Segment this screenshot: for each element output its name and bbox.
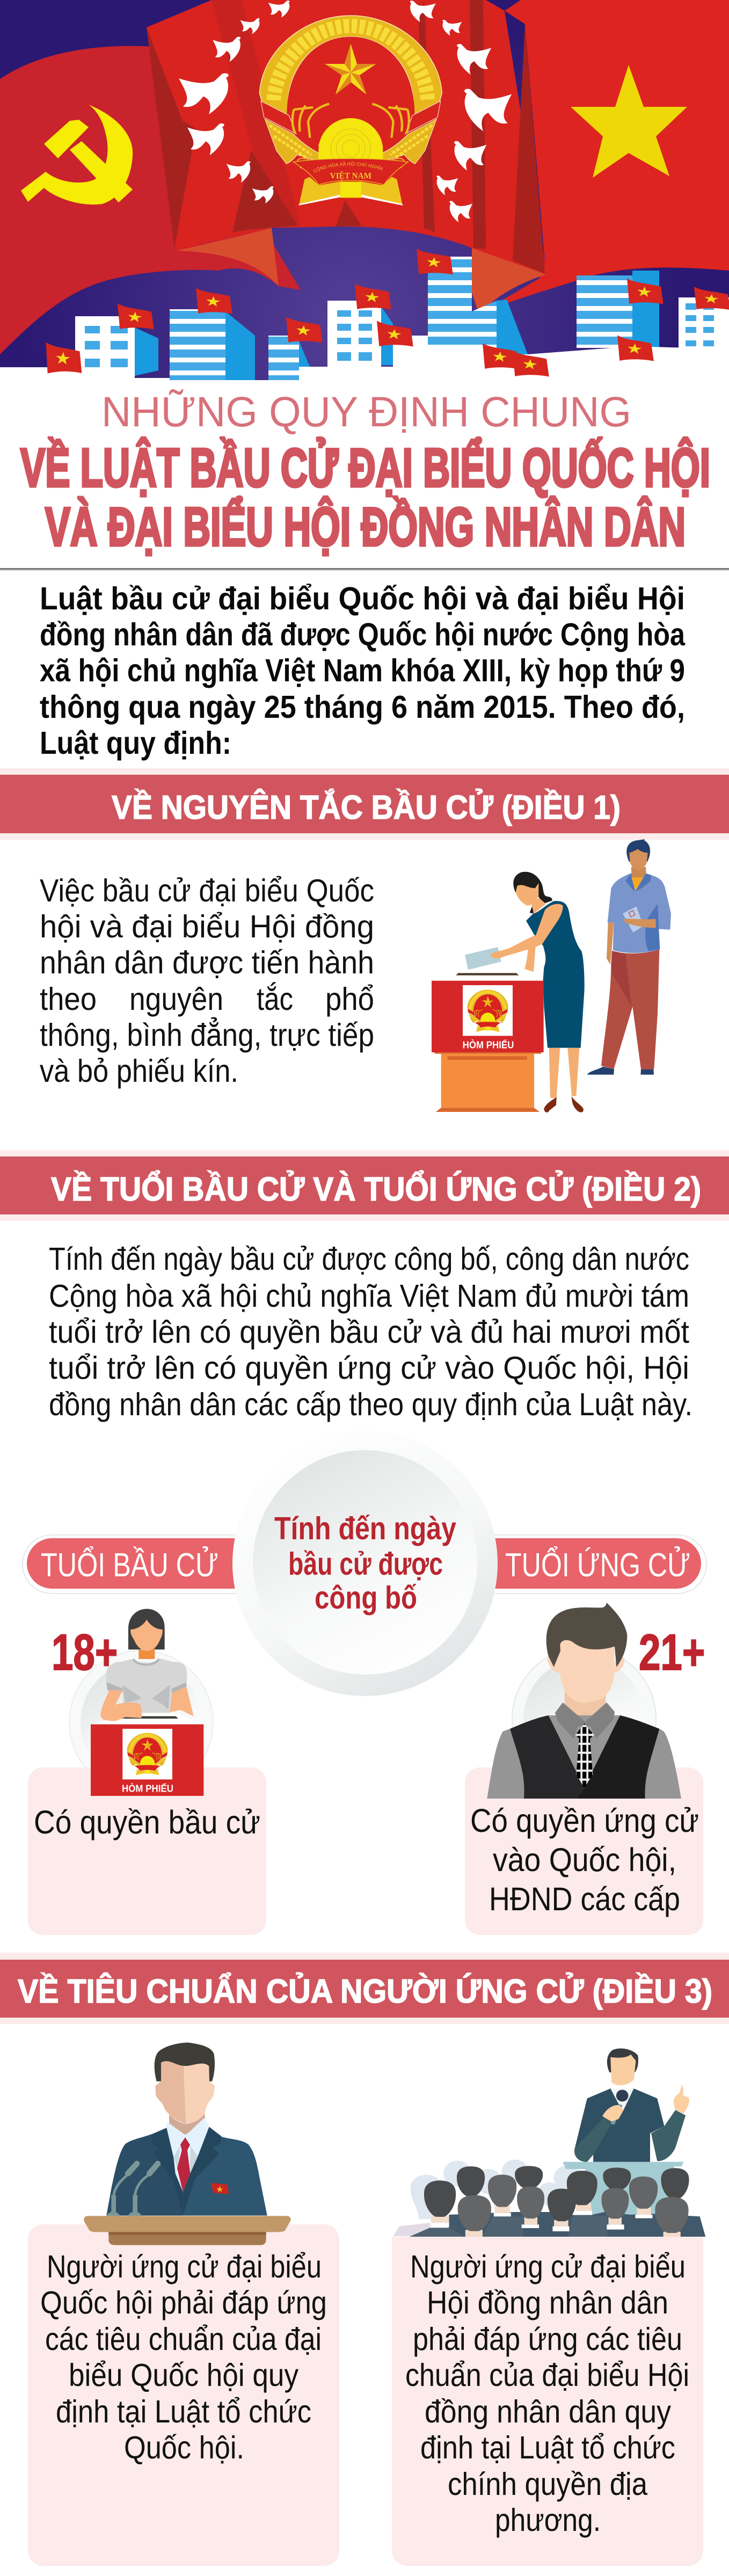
card: tiêu chuẩn đại biểu Quốc hội: định tại Luật tổ chức [56, 2394, 311, 2429]
pill label: tuổi bầu cử [23, 1535, 264, 1593]
icon: yellow star of the national flag [571, 65, 687, 178]
icon: national emblem [259, 15, 442, 206]
card: có quyền ứng cử: Có quyền ứng cử [470, 1802, 699, 1839]
halo behind left figure [69, 1650, 213, 1794]
section heading: Điều 3 [0, 1953, 729, 2024]
card: tiêu chuẩn đại biểu Hội đồng nhân dân: phải đáp ứng các tiêu [413, 2322, 682, 2357]
text block: Điều 1: Việc bầu cử đại biểu Quốc [40, 873, 374, 908]
card: tiêu chuẩn đại biểu Quốc hội: Quốc hội phải đáp ứng [40, 2285, 327, 2320]
intro paragraph: thông qua ngày 25 tháng 6 năm 2015. Theo đó, [40, 689, 685, 725]
text block: Điều 1: phổ [325, 981, 374, 1017]
card: tiêu chuẩn đại biểu Quốc hội [28, 2224, 339, 2566]
number: 21+: 21+ [639, 1624, 705, 1681]
icon: national emblem: VIỆT NAM [330, 172, 372, 181]
halo behind right figure [512, 1647, 656, 1791]
section heading: Điều 1: VỀ NGUYÊN TẮC BẦU CỬ (ĐIỀU 1) [112, 789, 621, 826]
text block: Điều 1: nguyên [129, 981, 223, 1017]
audience bodies [448, 2212, 705, 2237]
podium [563, 2162, 683, 2215]
necks and collars [431, 2204, 681, 2237]
man holding ballot [587, 839, 671, 1075]
illustration: delegate at lectern [84, 2042, 291, 2245]
small waving flags [43, 249, 729, 380]
card: tiêu chuẩn đại biểu Hội đồng nhân dân [392, 2237, 703, 2566]
lectern [84, 2216, 291, 2232]
ballot box [432, 973, 544, 1112]
microphones [114, 2164, 158, 2212]
audience heads front row [458, 2175, 689, 2233]
card: có quyền ứng cử [465, 1767, 703, 1935]
pill label: tuổi bầu cử: TUỔI BẦU CỬ [41, 1546, 218, 1584]
section heading: Điều 1 [0, 768, 729, 840]
intro paragraph: Luật bầu cử đại biểu Quốc hội và đại biểu Hội [40, 581, 685, 616]
pill label: tuổi ứng cử [462, 1535, 706, 1593]
ballot box: HÒM PHIẾU [463, 1039, 514, 1051]
text block: Điều 1: nhân dân được tiến hành [40, 945, 374, 980]
intro paragraph [40, 581, 686, 761]
text block: Điều 1: theo [40, 981, 97, 1017]
illustration: man candidate 21+ [487, 1603, 705, 1799]
text block: Điều 1: hội và đại biểu Hội đồng [40, 909, 374, 944]
card: có quyền bầu cử: Có quyền bầu cử [34, 1804, 260, 1840]
card: tiêu chuẩn đại biểu Quốc hội: Quốc hội. [124, 2430, 244, 2465]
card: tiêu chuẩn đại biểu Quốc hội: biểu Quốc hội quy [69, 2357, 298, 2393]
text block: Điều 1: tắc [257, 981, 293, 1017]
central circle callout: bầu cử được [288, 1546, 443, 1582]
central circle callout: công bố [315, 1580, 417, 1616]
card: có quyền bầu cử [28, 1767, 266, 1935]
card: tiêu chuẩn đại biểu Hội đồng nhân dân: phương. [495, 2502, 601, 2538]
central circle callout [232, 1431, 498, 1696]
card: tiêu chuẩn đại biểu Hội đồng nhân dân: chính quyền địa [448, 2466, 647, 2502]
section heading: Điều 2 [0, 1150, 729, 1221]
card: tiêu chuẩn đại biểu Hội đồng nhân dân: định tại Luật tổ chức [420, 2430, 675, 2465]
icon: hammer and sickle [21, 105, 133, 205]
illustration: woman voter 18+: HÒM PHIẾU [122, 1783, 173, 1794]
illustration: woman voter 18+ [52, 1609, 203, 1796]
audience heads back row [424, 2166, 689, 2221]
card: tiêu chuẩn đại biểu Hội đồng nhân dân: Hội đồng nhân dân [427, 2285, 668, 2320]
title [20, 388, 710, 557]
text block: Điều 2 [49, 1241, 692, 1422]
illustration: voters and ballot box [432, 839, 671, 1112]
card: tiêu chuẩn đại biểu Quốc hội: các tiêu chuẩn của đại [45, 2322, 322, 2357]
text block: Điều 2: tuổi trở lên có quyền ứng cử vào Quốc hội, Hội [49, 1350, 689, 1386]
card: có quyền ứng cử: HĐND các cấp [489, 1881, 680, 1917]
card: tiêu chuẩn đại biểu Quốc hội: Người ứng cử đại biểu [47, 2249, 322, 2284]
central circle callout: Tính đến ngày [274, 1511, 456, 1546]
city skyline buildings [75, 257, 729, 380]
text block: Điều 1: thông, bình đẳng, trực tiếp [40, 1017, 374, 1053]
text block: Điều 1: và bỏ phiếu kín. [40, 1053, 238, 1089]
ghost audience [411, 2159, 582, 2219]
card: có quyền ứng cử: vào Quốc hội, [493, 1842, 676, 1878]
card: tiêu chuẩn đại biểu Hội đồng nhân dân: Người ứng cử đại biểu [410, 2249, 686, 2284]
pill label: tuổi ứng cử: TUỔI ỨNG CỬ [505, 1546, 690, 1584]
banner: flags and emblem illustration [0, 0, 729, 380]
icon: white doves [179, 1, 512, 222]
woman casting ballot [465, 872, 585, 1112]
white ground strip [299, 336, 729, 381]
title: NHỮNG QUY ĐỊNH CHUNG [101, 388, 631, 435]
speaker [574, 2048, 689, 2162]
text block: Điều 2: tuổi trở lên có quyền bầu cử và đủ hai mươi mốt [49, 1314, 689, 1350]
text block: Điều 1 [40, 873, 374, 1089]
illustration: speaker addressing audience [393, 2048, 705, 2237]
number: 18+: 18+ [52, 1624, 118, 1681]
icon: national emblem: CỘNG HÒA XÃ HỘI CHỦ NGHĨA [314, 161, 382, 172]
card: tiêu chuẩn đại biểu Hội đồng nhân dân: chuẩn của đại biểu Hội [405, 2357, 689, 2393]
card: tiêu chuẩn đại biểu Hội đồng nhân dân: đồng nhân dân quy [425, 2394, 671, 2429]
intro paragraph: Luật quy định: [40, 725, 231, 761]
